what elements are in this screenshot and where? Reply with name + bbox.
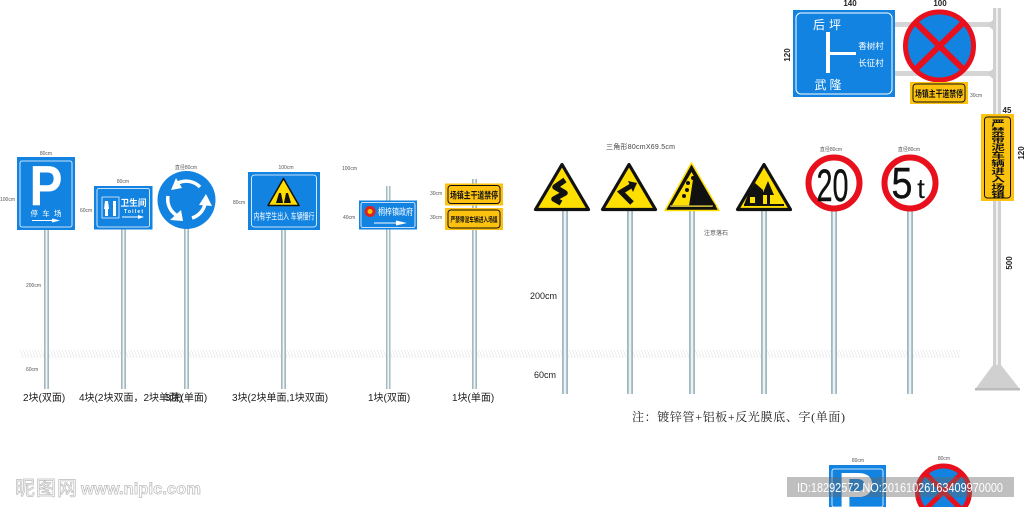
sign: toilet: 60cm (80, 208, 92, 214)
sign: vertical yellow plate: 泥 (991, 142, 1005, 152)
sign: town government: 桐梓镇政府 (378, 206, 413, 217)
sign: falling rocks warning: 注意落石 (704, 229, 728, 237)
sign: direction board (783, 0, 895, 97)
sign: parking: 80cm (40, 151, 52, 157)
sign: parking: 100cm (0, 197, 15, 203)
sign: vertical yellow plate: 镇 (991, 189, 1005, 199)
sign: toilet: Toilet (124, 209, 143, 215)
sign: speed limit 20: 20 (816, 160, 848, 211)
sign: direction board: 后坪 (813, 18, 841, 32)
sign: direction board: 长征村 (858, 58, 884, 68)
sign: vertical yellow plate: 入 (991, 175, 1005, 184)
sign: yellow plates (430, 179, 503, 389)
sign: vertical yellow plate: 严 (991, 119, 1005, 128)
sign: parking: 200cm (26, 283, 41, 289)
sign: parking: P (30, 154, 62, 218)
sign: curve warning (602, 164, 656, 394)
sign: school warning (233, 165, 320, 389)
sign: toilet (80, 179, 152, 389)
sign: yellow plates: 场镇主干道禁停 (450, 190, 498, 200)
sign: partial no parking at bottom: 80cm (938, 456, 950, 462)
sign: school warning: 100cm (278, 165, 294, 171)
sign: weight limit 5t (884, 146, 936, 394)
sign: partial parking at bottom: 80cm (852, 458, 864, 464)
sign: town government: 40cm (343, 215, 355, 221)
sign: town government (342, 166, 417, 389)
quantity labels: 3块(单面) (165, 392, 207, 404)
sign: school warning: 内有学生出入 车辆慢行 (254, 210, 314, 222)
sign: roundabout: 直径80cm (175, 164, 197, 171)
watermark: site logo: 昵图网 (15, 478, 77, 500)
quantity labels: 4块(2块双面，2块单面) (79, 392, 182, 404)
sign: direction board: 武隆 (814, 77, 842, 92)
triangle size caption: 三角形80cmX69.5cm (606, 142, 675, 151)
sign: yellow plate under no parking: 场镇主干道禁停 (915, 88, 963, 99)
sign: vertical yellow plate: 进 (991, 167, 1005, 176)
sign: vertical yellow plate: 禁 (991, 126, 1005, 136)
sign: yellow plate under no parking: 30cm (970, 93, 982, 99)
watermark: site logo (15, 478, 201, 500)
sign: vertical yellow plate: 辆 (991, 158, 1005, 168)
gantry pole: 500 (1005, 256, 1014, 270)
sign: school warning: 80cm (233, 200, 245, 206)
sign: vertical yellow plate: 带 (991, 134, 1005, 144)
sign: vertical yellow plate: 45 (1003, 106, 1012, 115)
sign: partial parking at bottom (829, 458, 886, 507)
sign: vertical yellow plate: 场 (991, 183, 1005, 192)
sign: winding road warning (530, 164, 588, 394)
quantity labels: 1块(单面) (452, 392, 494, 404)
ground hatch line (20, 350, 960, 358)
quantity labels: 1块(双面) (368, 392, 410, 404)
sign: direction board: 120 (783, 48, 792, 62)
watermark: image id (787, 477, 1014, 497)
sign: direction board: 香树村 (858, 41, 884, 51)
sign: no parking (906, 0, 974, 80)
watermark: site logo: www.nipic.com (80, 481, 201, 498)
sign: town government: 100cm (342, 166, 357, 172)
sign: yellow plates: 30cm (430, 191, 442, 197)
sign: vertical yellow plate: 车 (991, 150, 1005, 160)
sign: winding road warning: 200cm (530, 291, 557, 301)
gantry pole (895, 8, 1020, 390)
sign: yellow plates: 30cm (430, 215, 442, 221)
sign: weight limit 5t: 5 (892, 159, 912, 208)
sign: roundabout (158, 164, 216, 389)
sign: weight limit 5t: t (917, 173, 925, 204)
sign: falling rocks warning (665, 163, 728, 394)
sign: toilet: 80cm (117, 179, 129, 185)
sign: toilet: 卫生间 (120, 197, 146, 208)
sign: partial no parking at bottom (918, 456, 970, 507)
sign: winding road warning: 60cm (534, 370, 556, 380)
sign: yellow plates: 严禁带泥车辆进入场镇 (450, 215, 498, 224)
sign: parking (0, 151, 75, 389)
sign: village warning (738, 164, 790, 394)
sign: vertical yellow plate (981, 106, 1024, 201)
quantity labels: 3块(2块单面,1块双面) (232, 392, 328, 404)
sign: parking: 60cm (26, 367, 38, 373)
sign: parking: 停车场 (30, 208, 62, 218)
quantity labels: 2块(双面) (23, 392, 65, 404)
sign: weight limit 5t: 直径80cm (898, 146, 920, 153)
note: 注：镀锌管+铝板+反光膜底、字(单面) (632, 409, 845, 424)
sign: speed limit 20 (808, 146, 860, 394)
quantity labels (23, 392, 494, 404)
sign: yellow plate under no parking (910, 82, 982, 104)
sign: speed limit 20: 直径80cm (820, 146, 842, 153)
